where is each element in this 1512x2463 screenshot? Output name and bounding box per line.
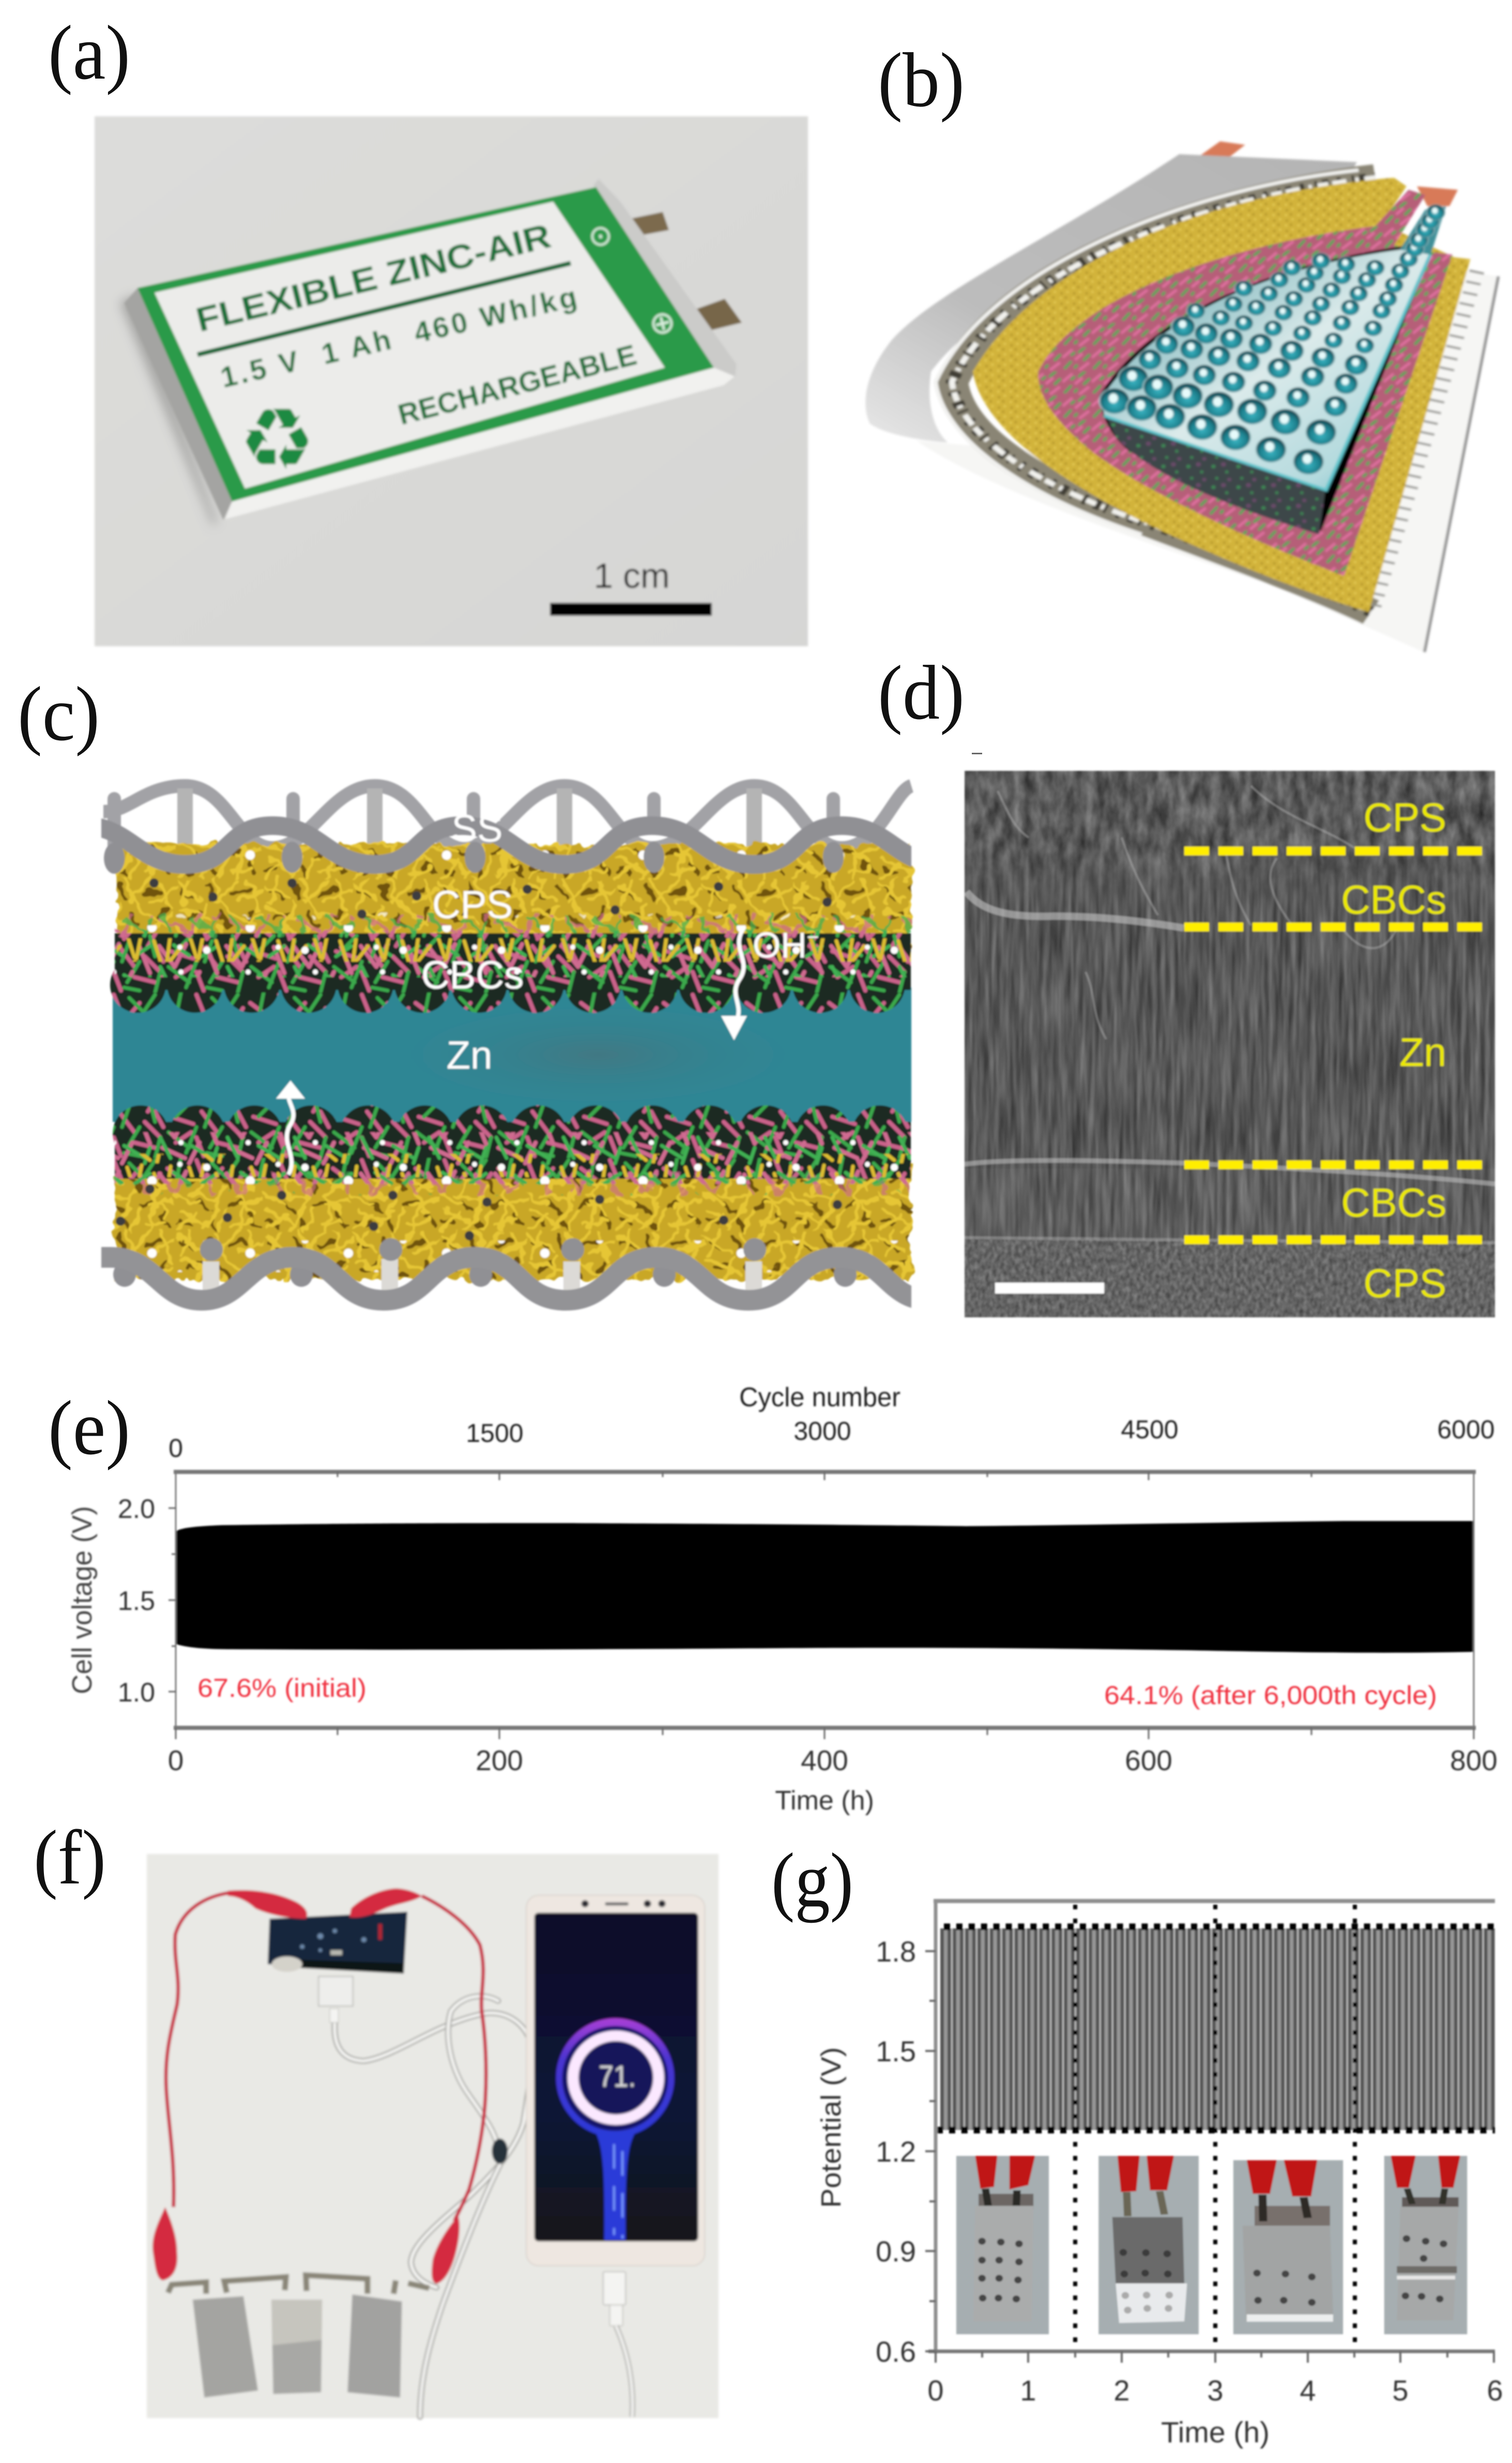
photo background [147,1854,719,2418]
white bottom sheet [917,268,1498,652]
battery right silver strip [593,179,737,376]
metal tab upper [623,212,669,237]
label Zn: Zn [1399,1029,1446,1075]
scale bar [550,603,712,616]
cell 3 [347,2294,402,2397]
x axis tick labels: 4 [1300,2374,1316,2407]
lower front mesh wave [98,1257,930,1300]
disc inner [562,2026,668,2131]
capacitor [272,1956,302,1972]
y axis tick labels: 2.0 [118,1494,155,1524]
small mark above micrograph [972,753,982,754]
x axis tick labels: 5 [1392,2374,1409,2407]
top axis tick labels: 1500 [466,1419,524,1448]
cell 2 [271,2300,322,2394]
charger plug neck [610,2305,623,2326]
phone screen [534,1913,698,2241]
crocodile clips on board [228,1888,422,1919]
battery bottom silver edge [225,368,735,519]
x axis tick labels: 600 [1125,1744,1172,1776]
top axis tick labels: 6000 [1437,1415,1495,1444]
domes on zinc plate [1099,204,1445,475]
copper tab rear [1199,141,1245,160]
label Zn: Zn [447,1033,492,1077]
label OH-: − [807,926,819,949]
x axis tick labels: 3 [1207,2374,1224,2407]
x axis tick labels: 200 [476,1744,523,1776]
zinc top plate [1102,250,1430,489]
axis ticks [925,1951,1494,2363]
USB plug [318,1977,353,2006]
panel b: exploded battery illustration [865,141,1498,652]
panel d: SEM micrograph [965,771,1495,1317]
x axis tick labels [927,2374,1503,2407]
top axis tick labels: 0 [169,1434,183,1463]
inset 3 [1233,2160,1343,2334]
panel c: cross-section schematic [83,786,944,1300]
panel label (c): (c) [18,671,100,757]
y axis title: Cell voltage (V) [67,1506,98,1694]
panel label (a): (a) [48,10,130,96]
extra fibers in CBC bands [115,915,911,1194]
phone body [526,1895,705,2266]
stem highlights [614,2144,622,2239]
x axis tick labels: 800 [1450,1744,1498,1776]
top axis tick labels [169,1415,1495,1463]
panel label (d): (d) [878,650,965,736]
x axis tick labels: 1 [1020,2374,1036,2407]
x axis title: Time (h) [1161,2416,1270,2449]
insets: photos of bent cells [956,2156,1467,2334]
zinc layer [113,987,911,1122]
board components [300,1924,382,1955]
icon: recycle symbol: ♻ [239,390,315,489]
label text: flexible zinc-air: FLEXIBLE ZINC-AIR [192,216,555,339]
top axis tick labels: 3000 [793,1417,851,1446]
y axis tick labels: 0.9 [876,2235,916,2268]
x axis tick labels: 2 [1113,2374,1130,2407]
x axis title: Time (h) [775,1786,874,1816]
y axis title: Potential (V) [816,2047,847,2208]
inset 2 [1098,2156,1199,2334]
inset 4 [1384,2156,1467,2334]
scale text: 1 cm [593,556,670,596]
lower CBC fibers with scallops [113,1105,911,1179]
copper tab front [1417,186,1458,206]
phone sensors [582,1900,666,1907]
icon: minus terminal: ⊙ [585,217,616,254]
SEM lighter CBC bands [965,1168,1495,1238]
cell 2 light top [271,2300,322,2345]
panel g: bending cycling chart [816,1901,1503,2449]
charger plug [603,2272,625,2305]
panel f: photo of batteries charging a phone [147,1854,719,2418]
upper mesh knobs [104,842,844,874]
chart frame [174,1472,1476,1728]
x axis tick labels: 0 [168,1744,184,1776]
battery white label area [155,202,665,489]
panel e: cycling chart [67,1382,1498,1816]
white USB cables [334,1996,531,2417]
charging stem [590,2123,642,2240]
label CPS: CPS [432,883,513,927]
panel label (g): (g) [771,1837,853,1923]
label CBCs: CBCs [421,953,524,997]
back wave of upper mesh [103,786,911,858]
zinc plate edge [1104,254,1430,490]
upper front mesh wave [83,826,944,864]
y axis tick labels: 0.6 [876,2335,916,2368]
zinc front face [1106,417,1325,534]
panel label (e): (e) [48,1385,130,1471]
y axis tick labels: 1.2 [876,2135,916,2168]
charging glow disc [556,2018,674,2137]
label OH-: OH [753,925,807,965]
metal tab lower [690,299,742,331]
x axis tick labels: 6 [1487,2374,1503,2407]
arrow: OH- transport upward [276,1081,305,1175]
SEM lower CPS layer [965,1240,1495,1317]
USB plug neck [330,2009,339,2023]
SEM ridges [965,786,1495,1243]
zinc tab strip [1399,206,1446,255]
label text: specifications: 1.5 V 1 Ah 460 Wh/kg [218,280,580,394]
label CBCs top: CBCs [1341,877,1446,922]
battery shadow [120,295,217,525]
x axis tick labels [168,1744,1498,1776]
white gaps among fibers [117,848,911,1272]
panel label (f): (f) [34,1815,106,1901]
cell 1 [193,2296,258,2397]
yellow CPS layer [973,178,1470,612]
lower mesh pillars and knobs [113,1238,857,1293]
SEM upper CPS layer [965,771,1495,905]
circuit board [268,1912,407,1973]
y axis tick labels: 1.0 [118,1678,155,1708]
outer grey sheet [865,154,1357,443]
label CPS bottom: CPS [1364,1260,1446,1306]
voltage band [176,1521,1474,1653]
top axis title: Cycle number [739,1382,900,1412]
arrow: OH- transport downward [721,931,747,1040]
upper yellow CPS fibers [117,844,911,950]
oscillating voltage trace [940,1928,1495,2130]
cable tie [492,2138,508,2164]
icon: plus terminal: ⊕ [645,302,679,344]
SEM zinc layer [965,771,1495,1241]
dotted dividers [1075,1905,1355,2351]
upper CBC fibers with scallops [110,933,911,1013]
carbon particles in CPS [116,878,842,1240]
y axis tick labels [118,1494,155,1708]
charging ring [573,2036,659,2120]
y axis tick labels: 1.8 [876,1935,916,1968]
stainless steel mesh band [936,170,1477,612]
crocodile clips on cells [152,2207,460,2284]
photo background [95,116,808,646]
axis ticks [169,1472,1474,1739]
battery green label [138,187,714,501]
SEM scale bar [995,1283,1104,1294]
label CPS top: CPS [1364,795,1446,840]
y axis tick labels: 1.5 [876,2035,916,2067]
annotation: final efficiency: 64.1% (after 6,000th cycle) [1104,1681,1437,1710]
yellow fibers crossing into CBC [117,938,911,1177]
x axis tick labels: 0 [927,2374,944,2407]
connector strips [168,2275,429,2294]
right sheet edge [1425,277,1498,652]
phone charging cable [616,2326,633,2417]
yellow dashed boundaries [1184,851,1491,1240]
y axis tick labels [876,1935,916,2368]
label text: rechargeable: RECHARGEABLE [394,338,640,431]
panel label (b): (b) [878,37,965,123]
label CBCs bottom: CBCs [1341,1180,1446,1225]
axes [928,1901,1495,2353]
pink and green CBC layer [1038,190,1453,576]
y axis tick labels: 1.5 [118,1586,155,1616]
annotation: initial efficiency: 67.6% (initial) [197,1674,366,1702]
lower yellow CPS fibers [115,1163,911,1280]
top axis tick labels: 4500 [1121,1415,1179,1444]
zinc darker centre [381,998,815,1112]
label SS: SS [452,807,502,850]
divider on battery label [197,263,571,355]
black gap around zinc [1099,246,1429,531]
battery left silver edge [124,288,232,520]
phone battery percentage: 71. [599,2060,636,2093]
upper voltage caps [944,1923,1495,1930]
board lower black edge [275,1959,404,1973]
panel a: photo of flexible zinc-air battery [95,116,808,646]
lower voltage caps [937,2127,1495,2133]
inset 1 [956,2156,1049,2334]
red wires [166,1893,486,2221]
x axis tick labels: 400 [801,1744,848,1776]
